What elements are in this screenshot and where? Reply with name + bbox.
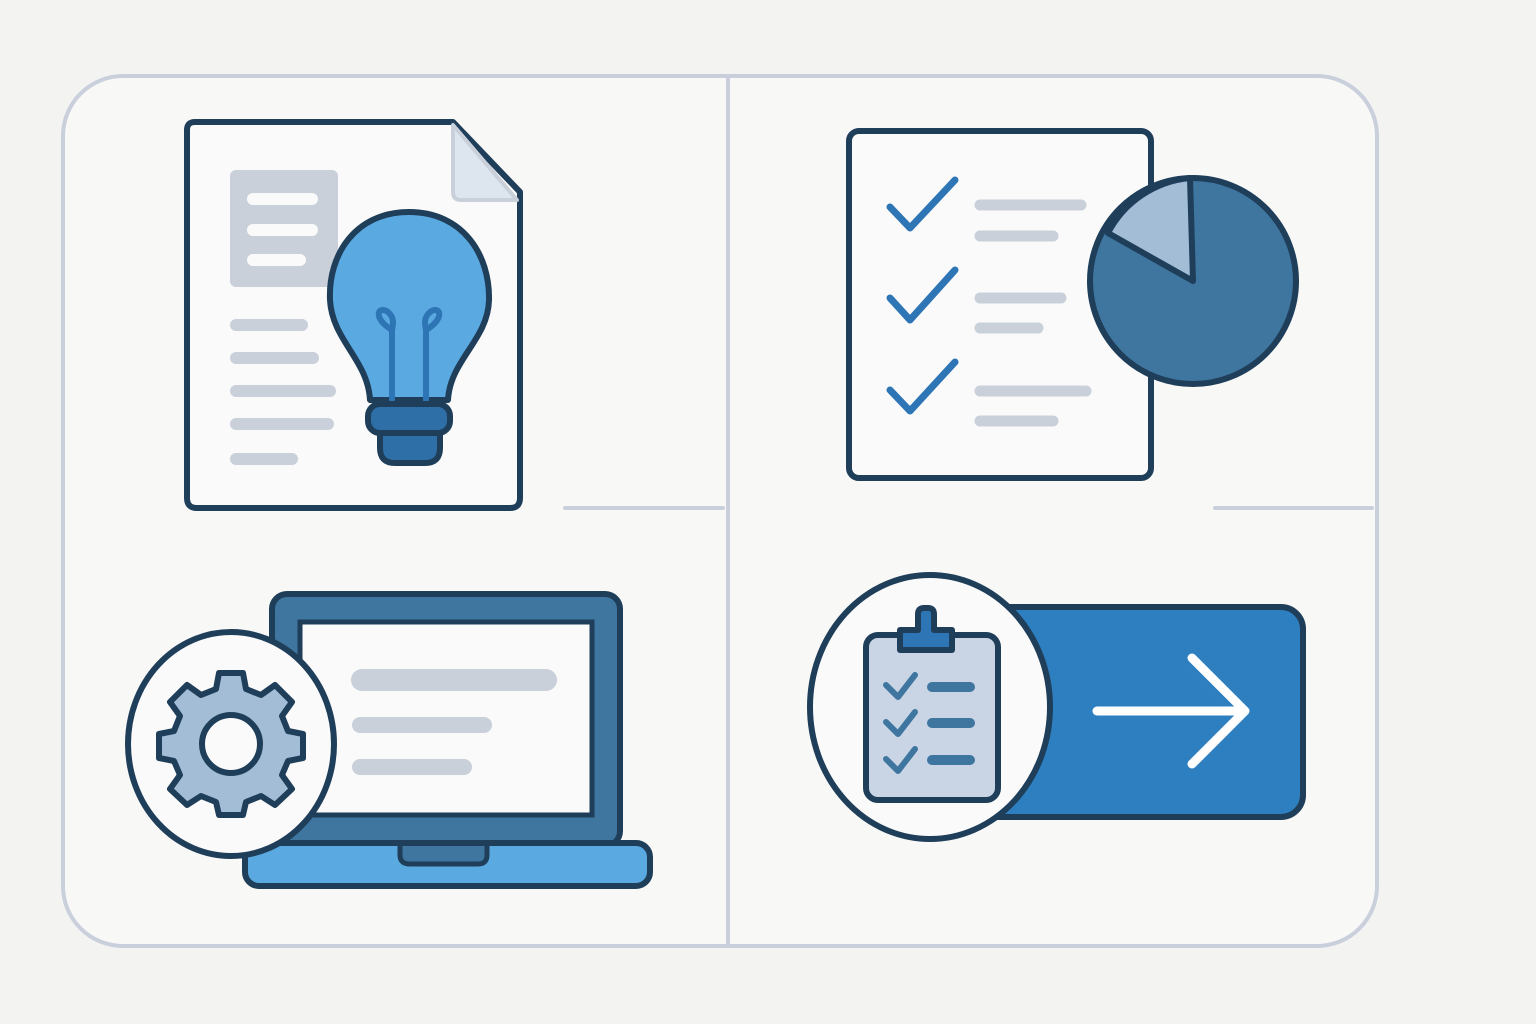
icon: clipboard with arrow button: [810, 575, 1303, 839]
pie chart: [1090, 178, 1296, 384]
icon: checklist with pie chart: [849, 131, 1296, 478]
icon: laptop with gear: [128, 594, 650, 886]
icon: document with light bulb: [187, 122, 520, 508]
clipboard: [866, 608, 998, 800]
gear circle: [128, 632, 334, 856]
panel: main frame: [63, 76, 1377, 946]
icon: bulb: [330, 212, 489, 463]
